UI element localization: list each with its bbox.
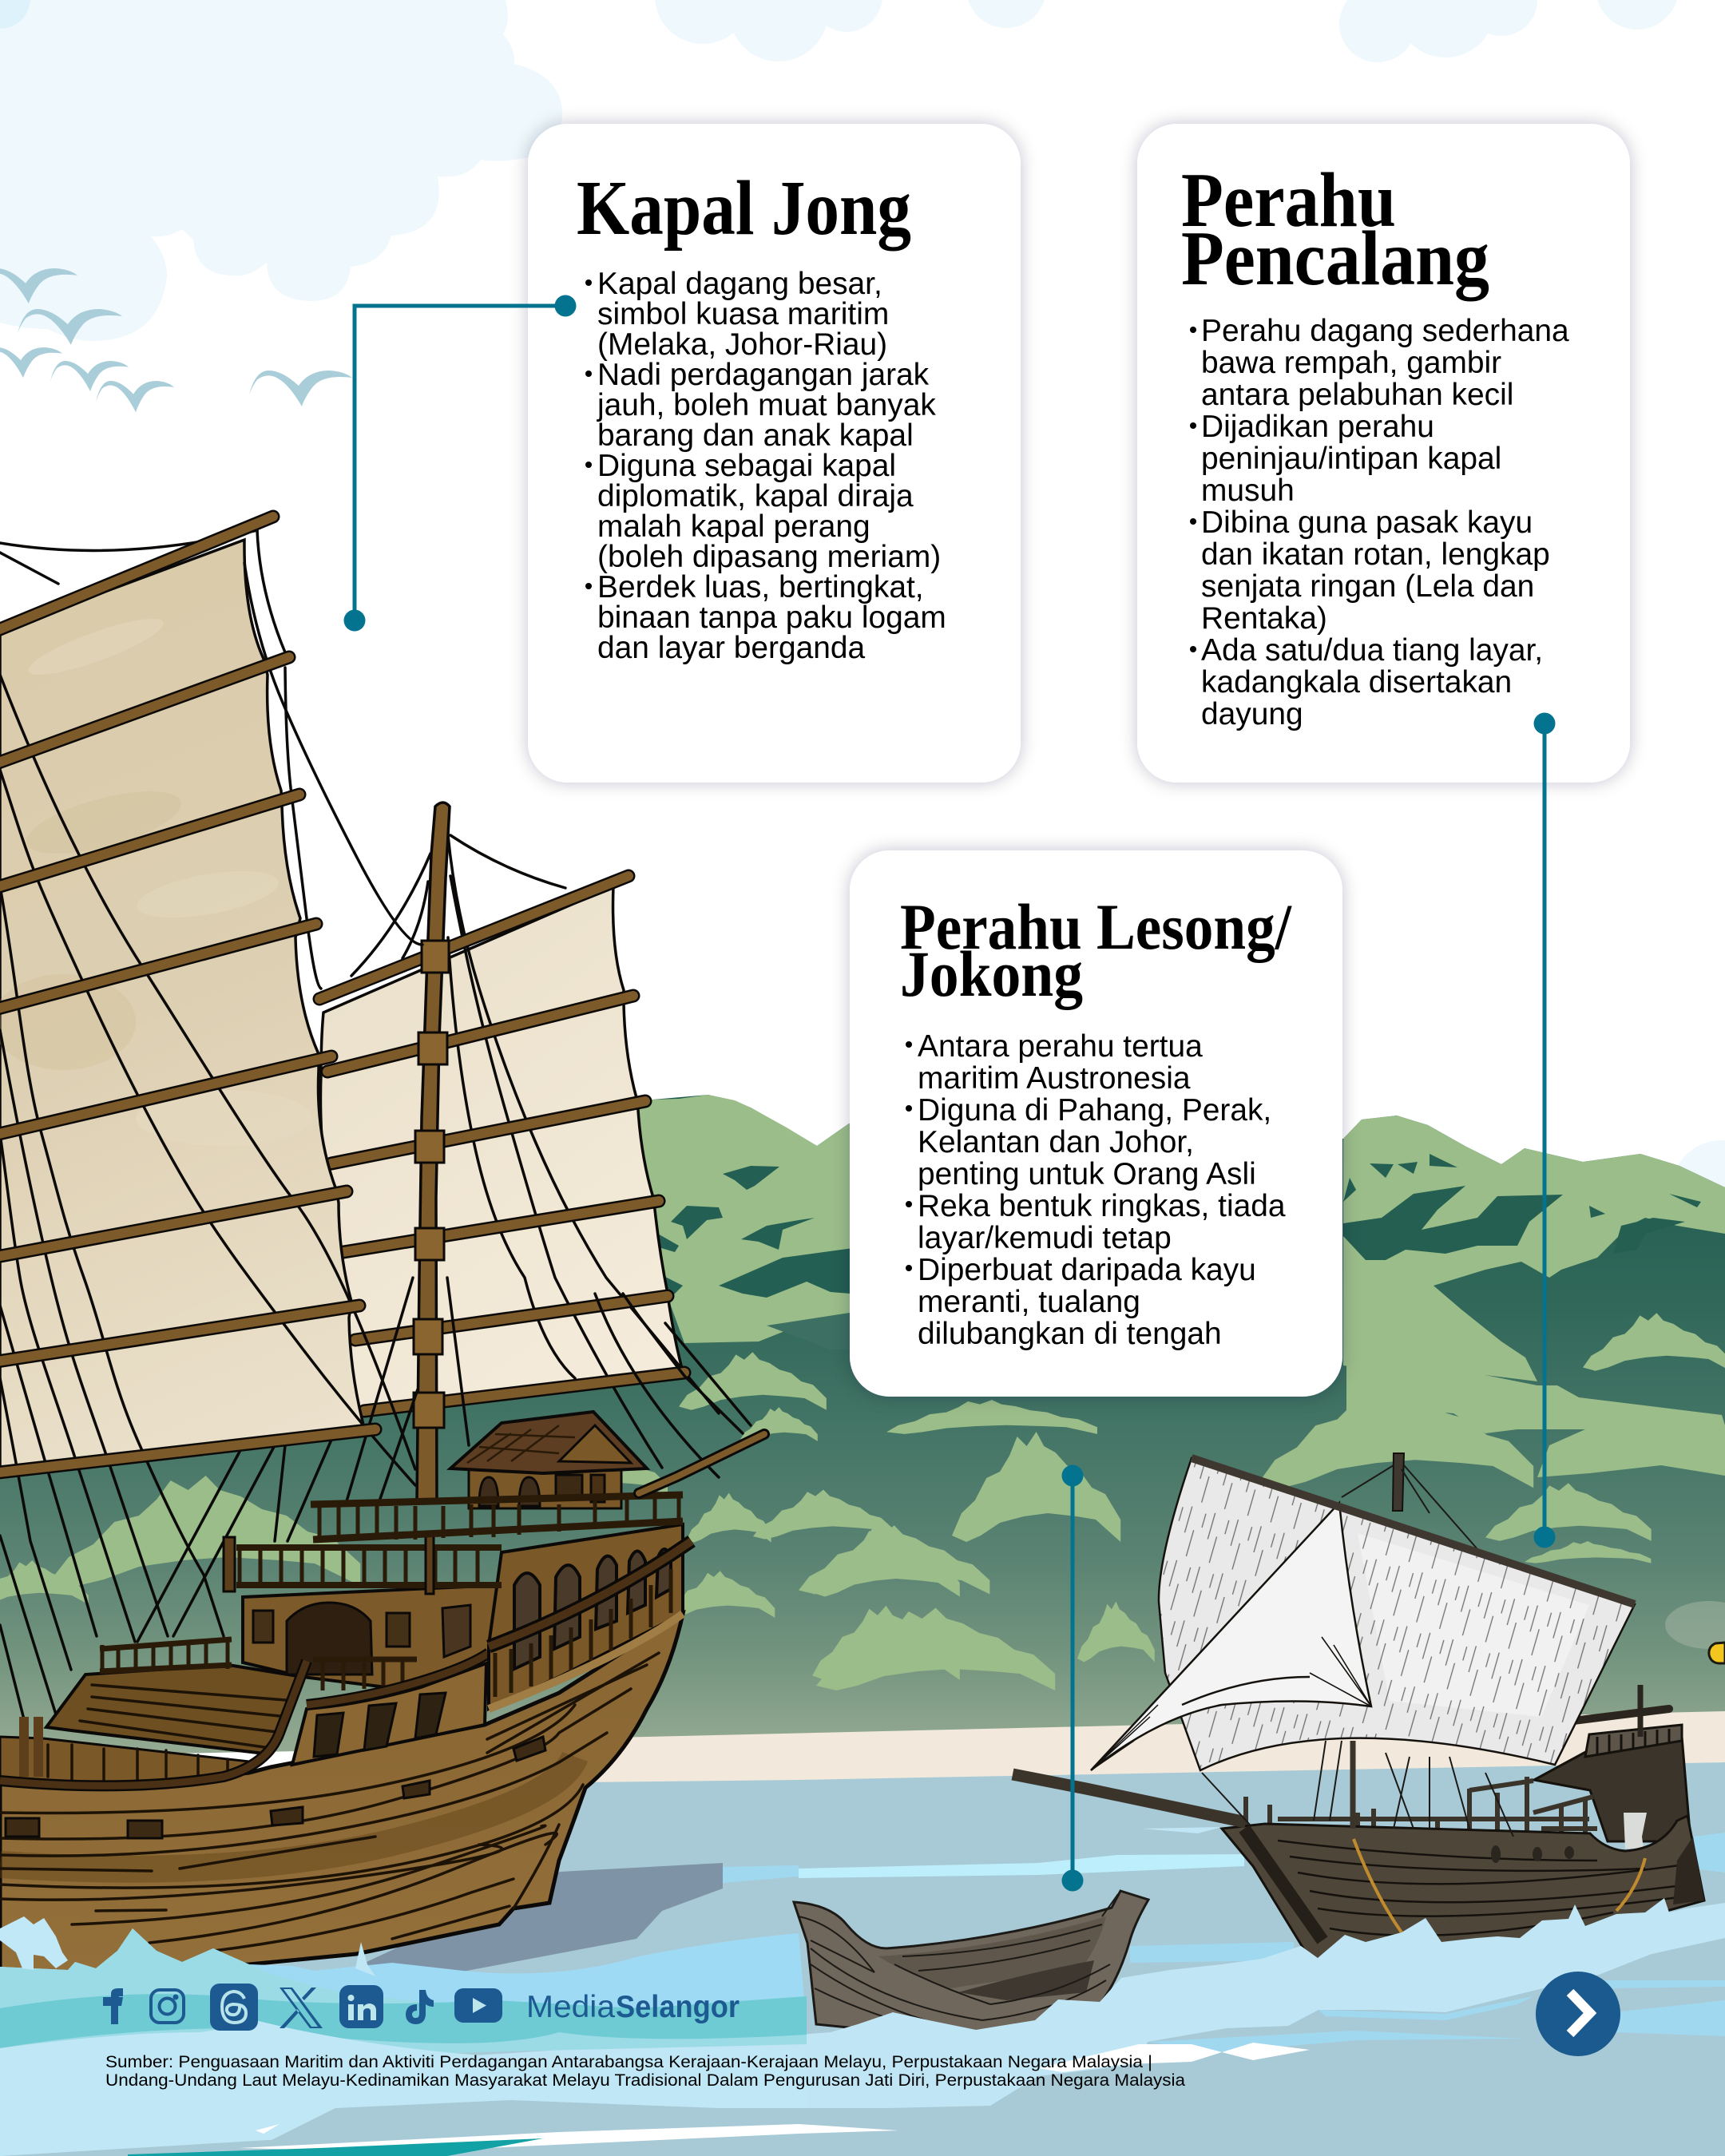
Perahu Pencalang bullet list: antara pelabuhan kecil (1201, 378, 1513, 412)
foam wake (0, 1898, 1725, 2156)
shadow of Kapal Jong on water (356, 1863, 723, 1972)
deck rails (1246, 1777, 1597, 1845)
Perahu Pencalang bullet list: Rentaka) (1201, 601, 1327, 636)
Perahu Lesong/Jokong bullet list: dilubangkan di tengah (918, 1317, 1222, 1351)
foreground water band light blue (0, 1928, 807, 2076)
foreground water band aqua (0, 1928, 807, 2068)
hull gunports (6, 1737, 545, 1838)
top house and roof (450, 1412, 647, 1508)
Perahu Lesong/Jokong bullet list (906, 1029, 1286, 1351)
social icons (103, 1984, 502, 2031)
sea (0, 1762, 1725, 2156)
Perahu Lesong/Jokong bullet list: Reka bentuk ringkas, tiada (918, 1189, 1286, 1223)
icon: linkedin (339, 1985, 383, 2028)
source text: Undang-Undang Laut Melayu-Kedinamikan Masyarakat Melayu Tradisional Dalam Pengurusan Jati Diri, Perpustakaan Negara Malaysia (105, 2071, 1185, 2090)
clouds (0, 0, 1725, 1239)
fore sail (319, 803, 719, 1501)
forecastle curved rail (0, 1653, 489, 1785)
Perahu Pencalang bullet list: dan ikatan rotan, lengkap (1201, 537, 1550, 572)
connector: Perahu Lesong (1062, 1464, 1083, 1891)
forecastle (292, 1663, 486, 1765)
big white sail (1159, 1458, 1635, 1770)
icon: X (280, 1988, 323, 2028)
small rail (100, 1639, 232, 1674)
Perahu Pencalang bullet list: senjata ringan (Lela dan (1201, 569, 1534, 604)
Kapal Jong bullet list: simbol kuasa maritim (597, 297, 889, 331)
mast (1393, 1453, 1404, 1511)
Perahu Lesong/Jokong bullet list: penting untuk Orang Asli (918, 1157, 1256, 1191)
ship: Perahu Pencalang (1013, 1453, 1704, 1963)
Kapal Jong bullet list: Diguna sebagai kapal (597, 449, 896, 483)
Kapal Jong bullet list: Nadi perdagangan jarak (597, 358, 930, 392)
Perahu Lesong/Jokong bullet list: maritim Austronesia (918, 1061, 1191, 1096)
Kapal Jong bullet list: diplomatik, kapal diraja (597, 479, 914, 513)
bottom white streaks (240, 2124, 898, 2152)
Perahu Pencalang bullet list: bawa rempah, gambir (1201, 346, 1501, 380)
bottom sea patches (240, 2044, 1725, 2156)
Kapal Jong bullet list: jauh, boleh muat banyak (597, 388, 936, 422)
Kapal Jong bullet list: malah kapal perang (597, 509, 870, 544)
Perahu Pencalang bullet list (1190, 314, 1569, 731)
Perahu Pencalang bullet list: dayung (1201, 697, 1303, 731)
Kapal Jong bullet list: Kapal dagang besar, (597, 267, 882, 301)
Perahu Pencalang heading: Perahu (1181, 157, 1396, 243)
Kapal Jong bullet list: (boleh dipasang meriam) (597, 540, 941, 574)
icon: next arrow (1536, 1972, 1620, 2056)
rear cabin with arches (489, 1524, 683, 1709)
bowsprit (639, 1434, 764, 1493)
icon: yellow fragment at right edge (1665, 1601, 1725, 1663)
panel: Perahu Pencalang (1137, 124, 1630, 783)
brand wordmark: Media (526, 1990, 615, 2024)
connector: Perahu Pencalang (1533, 712, 1556, 1548)
hill: light canopy right (1343, 1116, 1725, 1381)
Kapal Jong bullet list (585, 267, 946, 665)
Perahu Pencalang bullet list: Dibina guna pasak kayu (1201, 505, 1533, 540)
hull dark streak (0, 1757, 575, 1869)
main sail (0, 517, 751, 1726)
hills (0, 1095, 1725, 1757)
Kapal Jong bullet list: Berdek luas, bertingkat, (597, 570, 924, 604)
Perahu Pencalang bullet list: Perahu dagang sederhana (1201, 314, 1569, 348)
birds (0, 268, 352, 412)
Perahu Lesong/Jokong heading: Perahu Lesong/ (900, 890, 1292, 963)
connector: Kapal Jong (343, 295, 577, 631)
hill: leaf clusters (0, 1313, 1725, 1690)
ship: Perahu Lesong (794, 1891, 1148, 2040)
Kapal Jong bullet list: (Melaka, Johor-Riau) (597, 327, 887, 362)
fore mast (417, 803, 450, 1501)
Kapal Jong bullet list: barang dan anak kapal (597, 418, 914, 453)
hull (1222, 1816, 1704, 1963)
Perahu Lesong/Jokong bullet list: Diperbuat daripada kayu (918, 1253, 1256, 1287)
blue streaks under wake (1319, 1996, 1533, 2020)
panel: Perahu Lesong/Jokong (850, 850, 1342, 1397)
Perahu Pencalang bullet list: kadangkala disertakan (1201, 665, 1512, 700)
foreground water band teal (0, 1994, 807, 2048)
yard (1192, 1458, 1635, 1604)
foam and foreground water (0, 1898, 1725, 2156)
icon: tiktok (406, 1990, 434, 2024)
Perahu Pencalang heading: Pencalang (1181, 216, 1489, 301)
white diamonds (1038, 2043, 1310, 2072)
icon: facebook (103, 1988, 123, 2024)
main deck (0, 1665, 303, 1789)
brand wordmark: Selangor (616, 1990, 740, 2024)
stern castle (1534, 1737, 1691, 1841)
ship: Kapal Jong (0, 517, 764, 1972)
cabin lower (243, 1585, 502, 1693)
Perahu Lesong/Jokong bullet list: Antara perahu tertua (918, 1029, 1203, 1064)
rail band middle (224, 1532, 502, 1594)
Perahu Lesong/Jokong bullet list: layar/kemudi tetap (918, 1221, 1172, 1255)
hull planks (0, 1653, 659, 1951)
foam on Jong hull (0, 1916, 68, 1970)
Perahu Pencalang bullet list: musuh (1201, 474, 1295, 508)
bowsprit (1013, 1774, 1246, 1822)
icon: youtube (454, 1988, 502, 2023)
Perahu Lesong/Jokong bullet list: Kelantan dan Johor, (918, 1125, 1194, 1159)
jib (1091, 1503, 1371, 1770)
hull (0, 1614, 683, 1972)
upper rail (311, 1495, 683, 1540)
panel: Kapal Jong (528, 124, 1021, 783)
Kapal Jong bullet list: dan layar berganda (597, 631, 866, 665)
Perahu Pencalang bullet list: Ada satu/dua tiang layar, (1201, 633, 1543, 668)
icon: threads (210, 1984, 258, 2031)
Perahu Lesong/Jokong bullet list: meranti, tualang (918, 1285, 1140, 1319)
beach (479, 1711, 1725, 1789)
foreground water band pale (0, 2020, 807, 2156)
Kapal Jong heading: Kapal Jong (577, 165, 911, 251)
hill: lower right canopy (1346, 1349, 1725, 1477)
Perahu Pencalang bullet list: Dijadikan perahu (1201, 410, 1434, 444)
light band right of Jong shadow (723, 1865, 799, 1883)
Perahu Lesong/Jokong heading: Jokong (900, 937, 1083, 1010)
Perahu Lesong/Jokong bullet list: Diguna di Pahang, Perak, (918, 1093, 1271, 1128)
icon: instagram (151, 1990, 184, 2023)
Kapal Jong bullet list: binaan tanpa paku logam (597, 600, 946, 635)
source text: Sumber: Penguasaan Maritim dan Aktiviti Perdagangan Antarabangsa Kerajaan-Kerajaan Melayu, Perpustakaan Negara Malaysia | (105, 2053, 1152, 2071)
rigging (1202, 1465, 1513, 1837)
Perahu Pencalang bullet list: peninjau/intipan kapal (1201, 442, 1501, 476)
hill: light canopy left (615, 1095, 870, 1349)
